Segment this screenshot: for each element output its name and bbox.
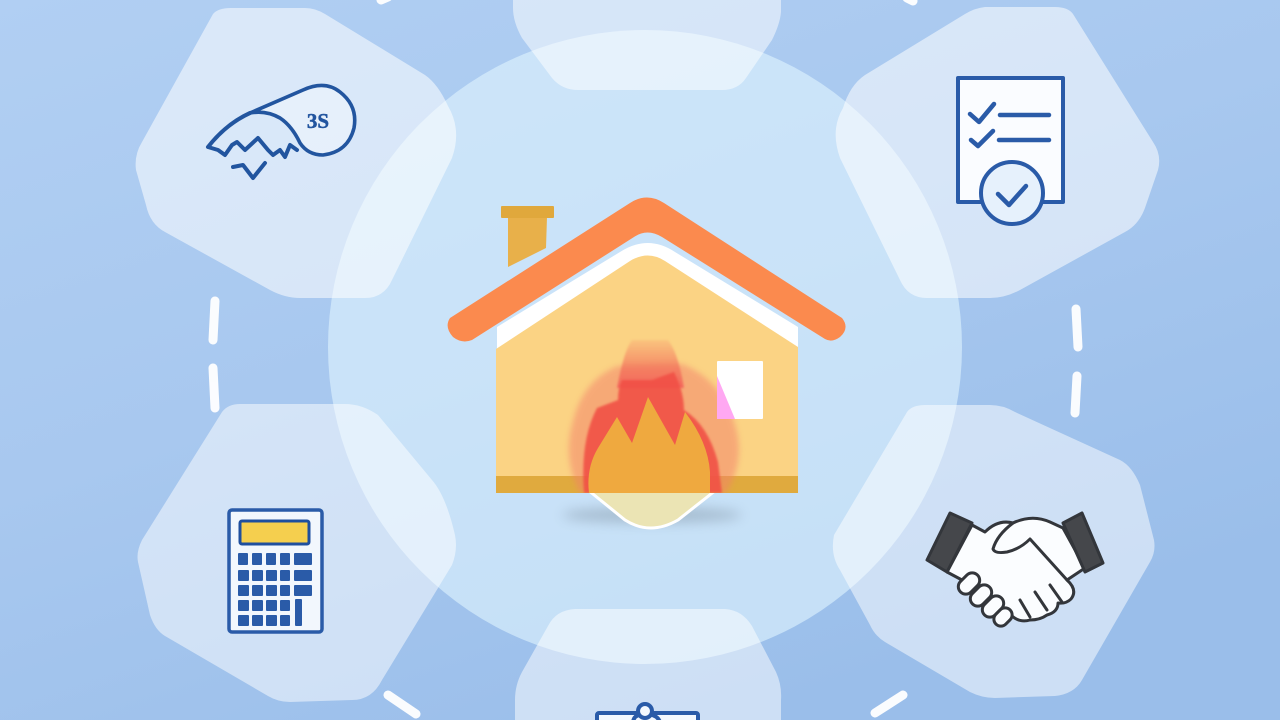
calculator body	[229, 510, 322, 632]
flame tongue	[617, 340, 684, 388]
icon: calculator	[229, 510, 322, 632]
panel: bottom hexagon	[515, 609, 781, 720]
ground shadow	[562, 507, 742, 523]
window reflection	[717, 376, 735, 419]
seal check mark	[998, 186, 1026, 205]
flame outer glow	[569, 364, 739, 493]
illustration: burning house	[448, 198, 846, 528]
flame base bulb	[588, 490, 716, 528]
fingers	[955, 570, 1015, 629]
calculator keys	[238, 553, 312, 626]
clipboard arc	[633, 714, 660, 720]
swirl teardrop	[250, 85, 355, 155]
dashed orbit segments	[213, 0, 1078, 714]
panel: bottom right hexagon	[833, 405, 1154, 698]
roof	[448, 198, 846, 341]
icon: handshake	[927, 513, 1103, 629]
chimney cap	[501, 206, 554, 218]
panel: top hexagon	[513, 0, 781, 90]
approval seal	[981, 162, 1043, 224]
panel: top left hexagon	[136, 8, 456, 298]
small wave	[233, 163, 265, 178]
hands	[947, 518, 1085, 621]
panel: top right hexagon	[836, 7, 1159, 298]
white fascia	[497, 243, 798, 350]
first check item	[970, 104, 1049, 122]
wave crest	[208, 113, 297, 157]
second check item	[971, 131, 1049, 146]
clipboard board	[597, 713, 698, 720]
clipboard clip	[638, 704, 652, 718]
icon: clipboard	[597, 704, 698, 720]
swirl label: 3S	[307, 109, 329, 133]
chimney	[501, 206, 554, 267]
window	[717, 361, 763, 419]
chimney stack	[508, 217, 547, 267]
house wall	[496, 256, 798, 493]
thumb and finger lines	[993, 523, 1067, 617]
left cuff	[927, 513, 972, 572]
panel: bottom left hexagon	[138, 404, 456, 702]
flame	[569, 340, 739, 493]
floor strip	[496, 476, 798, 493]
icon: checklist document	[958, 78, 1063, 224]
icon: wave and swirl	[208, 85, 355, 178]
flame red layer	[583, 372, 722, 493]
central circle	[328, 30, 962, 664]
document sheet	[958, 78, 1063, 202]
right cuff	[1063, 513, 1103, 572]
flame core	[588, 397, 710, 493]
window pane	[717, 361, 763, 419]
calculator display	[240, 521, 309, 544]
